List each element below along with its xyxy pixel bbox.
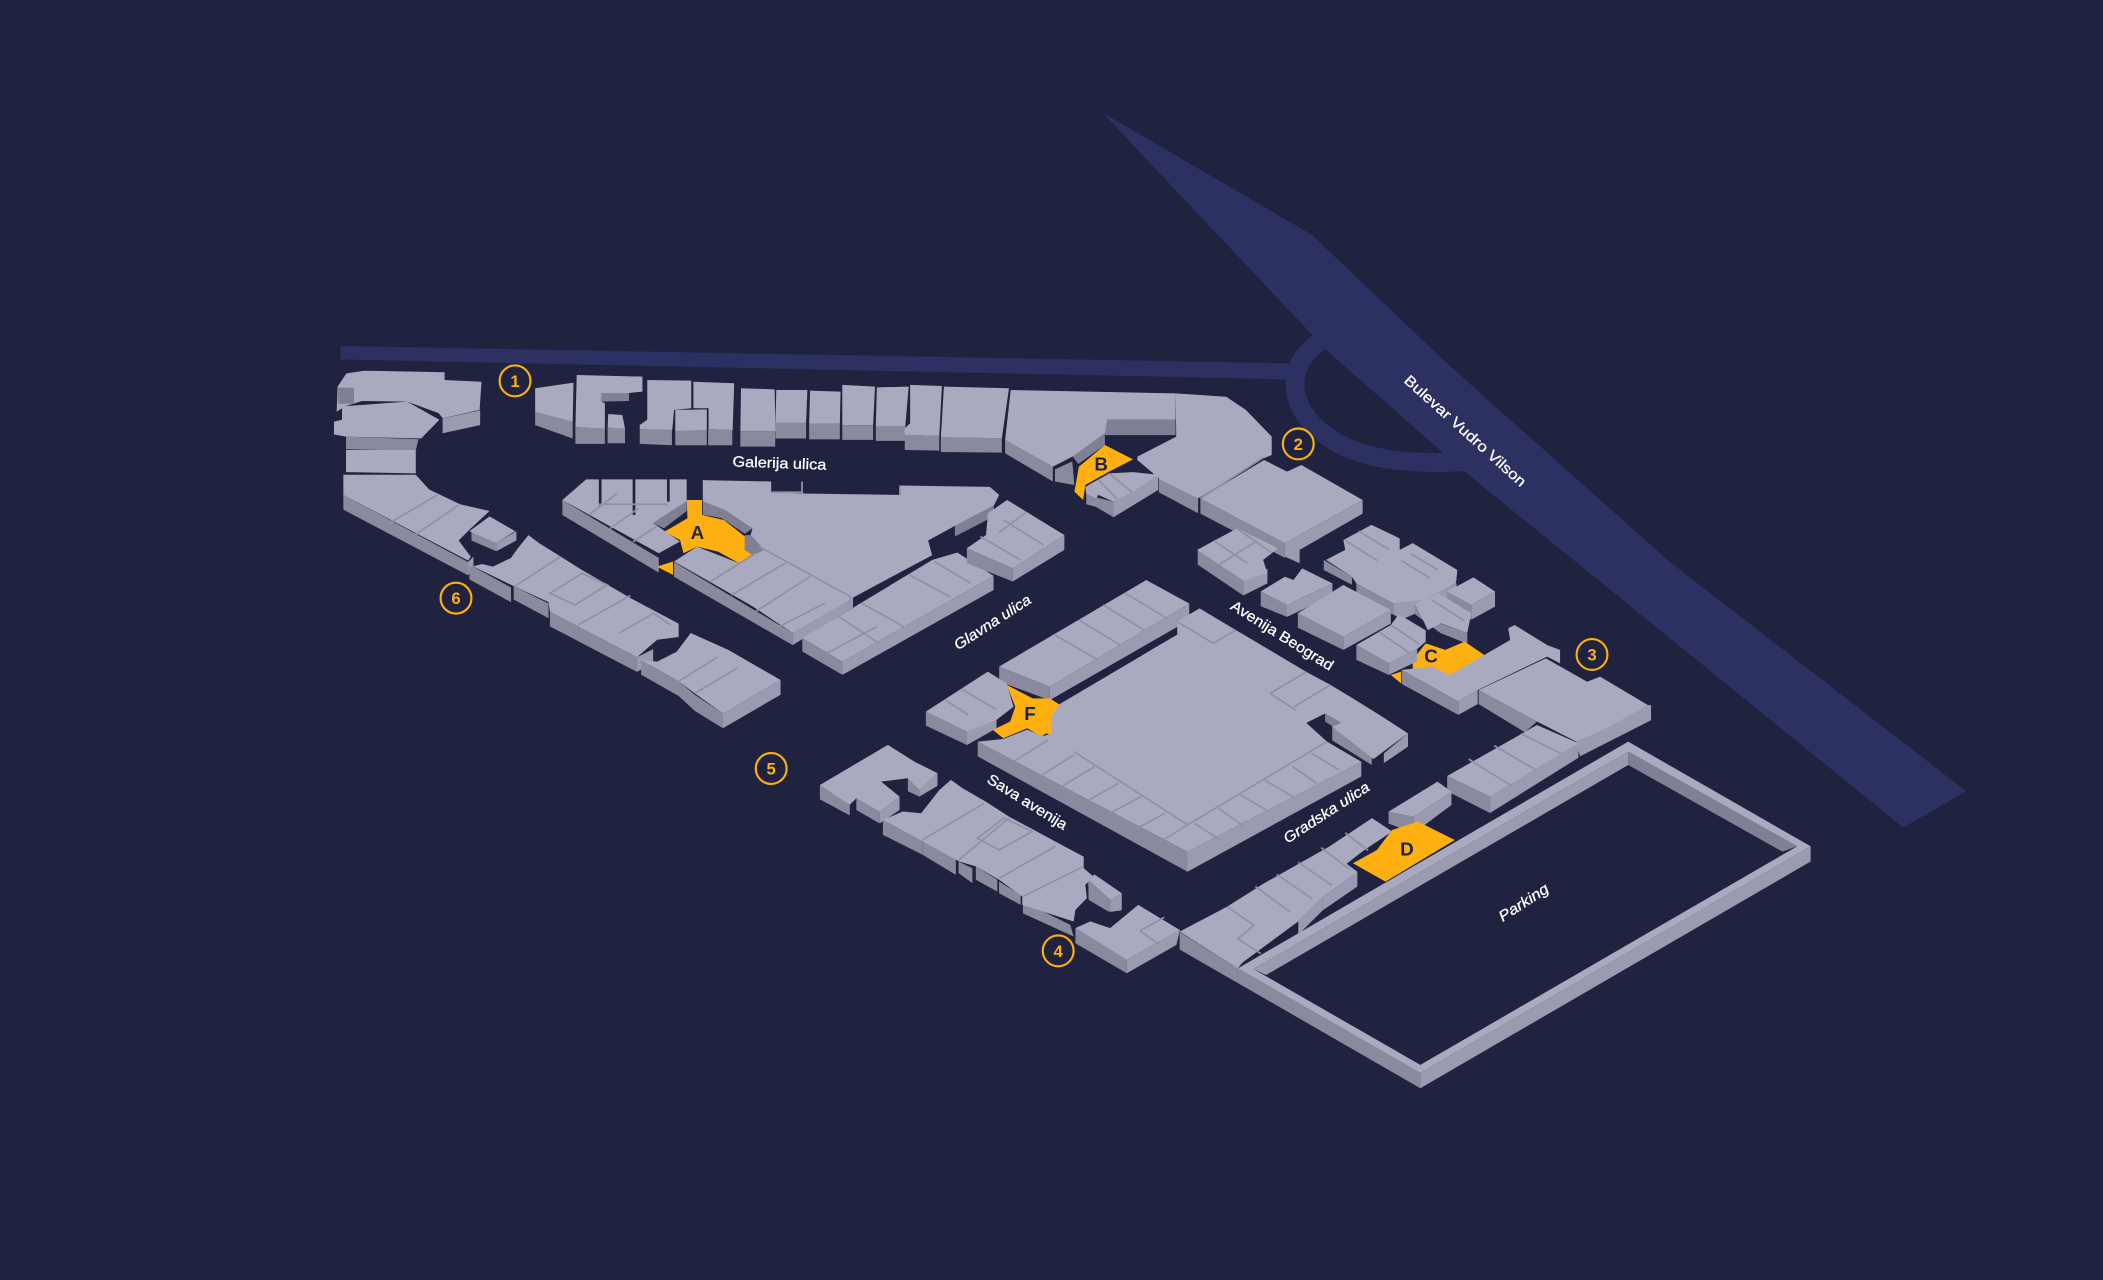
orange zone A <box>657 500 754 575</box>
buildings: north row <box>535 375 1009 453</box>
orange zone C <box>1391 642 1484 683</box>
buildings: south-west strip (zone 6) <box>469 535 679 672</box>
orange zone B: B <box>1094 454 1108 475</box>
label: Parking: Parking <box>1496 881 1553 925</box>
orange zone F: F <box>1024 703 1036 724</box>
marker 5: 5 <box>767 760 776 779</box>
buildings: east cluster <box>1197 525 1495 650</box>
buildings: west curved block <box>334 371 516 575</box>
buildings: corner block around B <box>1005 390 1363 563</box>
marker 6: 6 <box>451 589 461 608</box>
buildings: Galerija-Glavna main block <box>674 480 1064 675</box>
marker 1: 1 <box>510 372 520 391</box>
marker 5 <box>756 753 787 784</box>
buildings: block left of F <box>926 672 1014 745</box>
label: Bulevar Vudro Vilson: Bulevar Vudro Vilson <box>1400 373 1529 490</box>
buildings: south-west row of parking <box>1180 818 1392 983</box>
orange zone B <box>1074 445 1133 500</box>
label: Sava avenija: Sava avenija <box>984 772 1070 834</box>
buildings: north-east row of parking <box>1389 725 1578 833</box>
label: Avenija Beograd: Avenija Beograd <box>1227 598 1336 674</box>
buildings: Sava south-west strip <box>820 745 1122 937</box>
label: Gradska ulica: Gradska ulica <box>1281 780 1373 847</box>
marker 1 <box>500 365 530 396</box>
buildings: central block north-west row <box>999 580 1189 700</box>
orange zone D <box>1353 822 1455 882</box>
marker 3: 3 <box>1587 646 1597 665</box>
orange zone A: A <box>691 522 705 543</box>
marker 2: 2 <box>1294 435 1303 454</box>
orange zone D: D <box>1400 839 1414 860</box>
marker 6 <box>441 583 471 614</box>
orange zone F <box>993 685 1060 738</box>
label: Galerija ulica: Galerija ulica <box>732 454 827 474</box>
buildings: block around C <box>1356 614 1651 756</box>
buildings: south-west strip end <box>641 633 781 728</box>
marker 3 <box>1577 639 1607 670</box>
buildings: south tip near zone 4 <box>1075 905 1180 973</box>
buildings: Galerija-Glavna block left <box>562 479 687 573</box>
label: Glavna ulica: Glavna ulica <box>952 592 1034 654</box>
parking structure <box>1238 742 1811 1088</box>
orange zone C: C <box>1424 646 1438 667</box>
buildings: central block <box>978 608 1408 872</box>
roads <box>341 113 1966 827</box>
marker 4: 4 <box>1054 942 1064 961</box>
marker 2 <box>1283 428 1314 459</box>
marker 4 <box>1043 935 1074 966</box>
